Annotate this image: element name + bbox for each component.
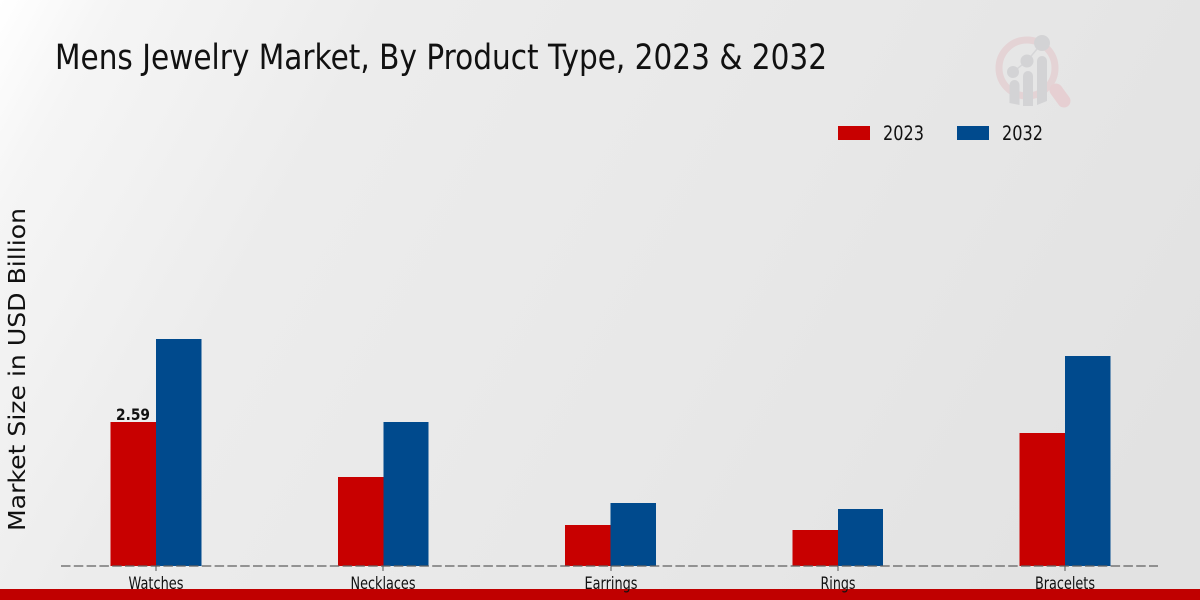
title: Mens Jewelry Market, By Product Type, 2023 & 2032 [55,38,827,78]
category label: Bracelets: Bracelets [1035,574,1095,593]
group: Earrings [565,503,656,566]
legend swatch: 2032 [957,126,989,140]
legend label: 2032: 2032 [1002,122,1043,145]
category tick marks [156,566,1065,571]
legend swatch: 2023 [838,126,870,140]
group: Bracelets [1020,356,1110,566]
legend label: 2023: 2023 [883,122,924,145]
group: Rings [792,509,883,566]
value label: 2.59: 2.59 [116,405,150,424]
category label: Watches: Watches [128,574,184,593]
baseline [61,565,1158,567]
group: Necklaces [338,422,428,566]
watermark logo [999,35,1064,106]
bar chart [61,339,1158,566]
category label: Earrings: Earrings [584,574,638,593]
footer bar [0,589,1200,600]
legend [838,122,1043,145]
group: Watches [110,339,202,566]
category label: Necklaces: Necklaces [350,574,416,593]
y-axis title: Market Size in USD Billion [5,208,31,531]
category label: Rings: Rings [820,574,856,593]
